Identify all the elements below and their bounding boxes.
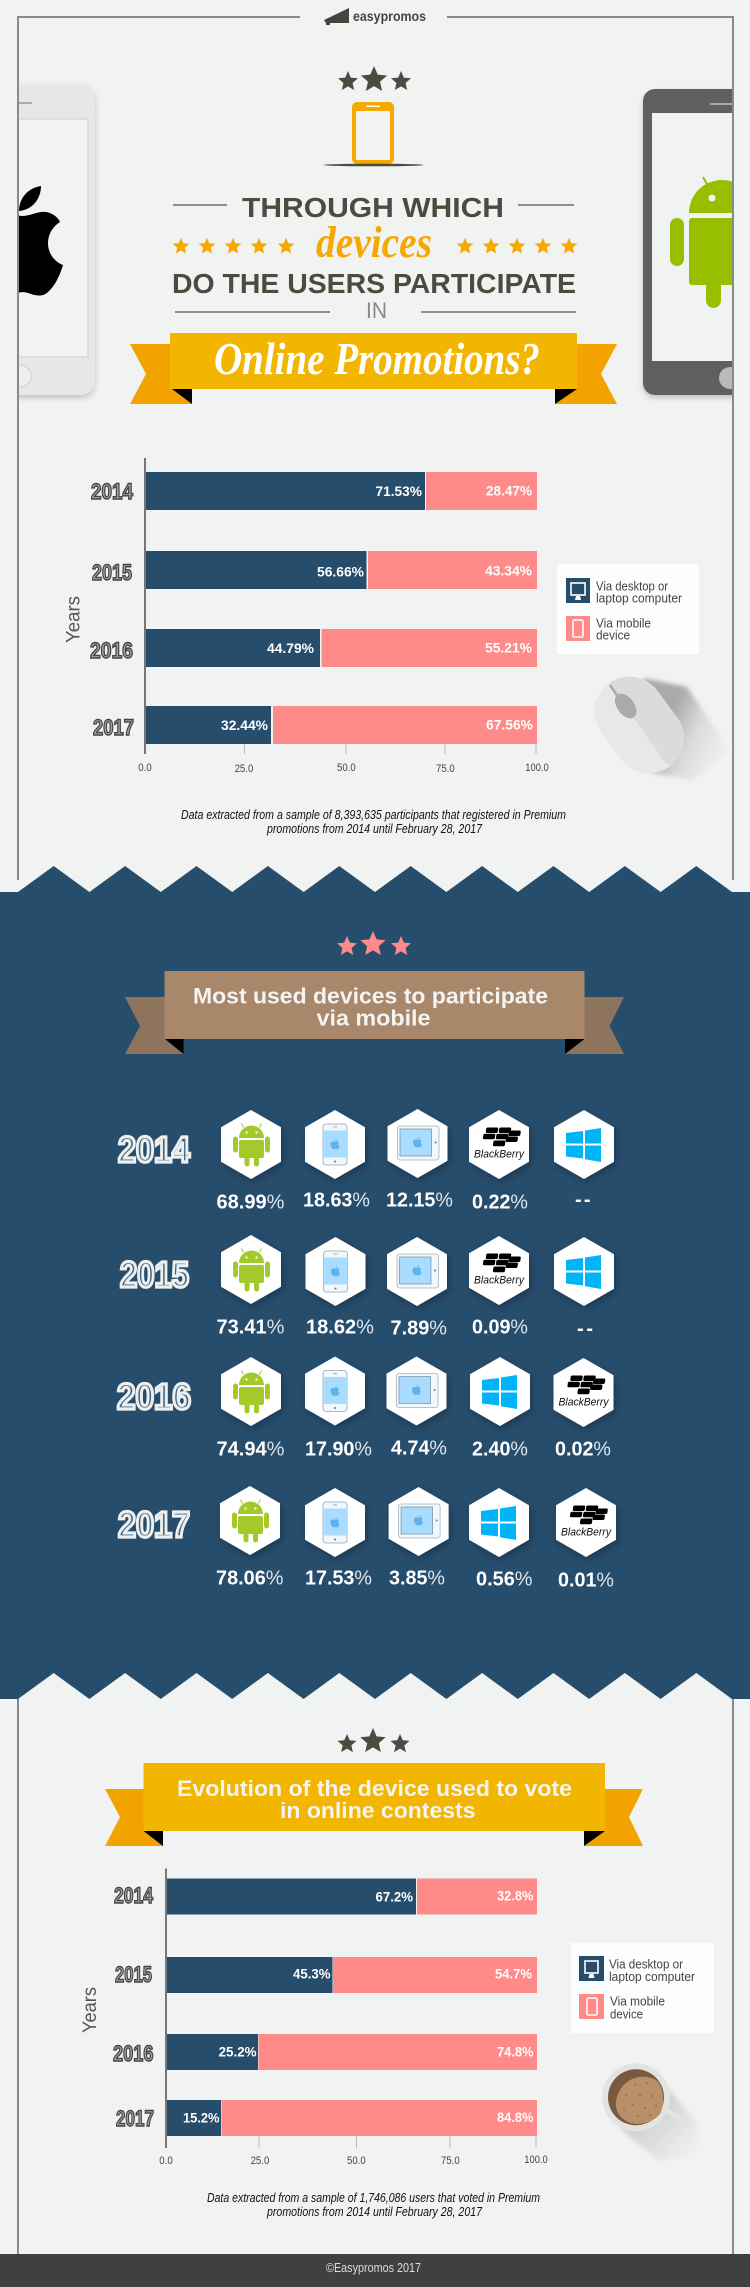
bar chart: participation by device 2014-2017: 2015 bbox=[92, 560, 132, 585]
bar chart: participation by device 2014-2017: 56.66% bbox=[317, 564, 365, 580]
axis label: Years: Years bbox=[64, 596, 84, 643]
legend: device colours: device bbox=[610, 2006, 643, 2022]
row: 2017: 3.85% bbox=[389, 1568, 445, 1590]
row: 2017 bbox=[118, 1486, 616, 1592]
bar chart: participation by device 2014-2017: 50.0 bbox=[337, 762, 356, 774]
bar chart: voting device 2014-2017: 2017 bbox=[116, 2106, 154, 2131]
row: 2017: 17.53% bbox=[305, 1568, 372, 1590]
bar chart: participation by device 2014-2017: 44.79% bbox=[267, 640, 315, 656]
bar chart: participation by device 2014-2017: 0.0 bbox=[138, 762, 152, 774]
bar chart: voting device 2014-2017: 15.2% bbox=[183, 2110, 220, 2126]
row: 2016: 74.94% bbox=[216, 1438, 285, 1460]
row: 2017: 78.06% bbox=[216, 1568, 284, 1590]
caption: second chart bbox=[207, 2190, 540, 2219]
panel: most used devices via mobile bbox=[0, 866, 750, 1699]
row of stars left of devices bbox=[173, 238, 294, 254]
row of stars right of devices bbox=[457, 238, 577, 254]
illustration: white iPhone with apple logo bbox=[19, 84, 98, 400]
bar chart: voting device 2014-2017: 75.0 bbox=[441, 2155, 460, 2167]
legend: device colours: laptop computer bbox=[609, 1969, 696, 1984]
row: 2017: 0.01% bbox=[558, 1570, 614, 1592]
row: 2015: 73.41% bbox=[216, 1316, 285, 1338]
legend: device colours: Via mobile bbox=[610, 1994, 665, 2008]
title: THROUGH WHICH bbox=[242, 192, 504, 223]
row: 2015: BlackBerry bbox=[474, 1274, 525, 1286]
bar chart: voting device 2014-2017: 54.7% bbox=[495, 1966, 533, 1982]
bar chart: participation by device 2014-2017: 43.34% bbox=[485, 562, 533, 578]
illustration: dark Android phone bbox=[640, 89, 732, 400]
bar chart: participation by device 2014-2017: 32.44% bbox=[221, 717, 269, 733]
legend: device colours: device bbox=[596, 628, 630, 642]
banner: Online Promotions? bbox=[130, 333, 617, 404]
legend: device colours bbox=[557, 564, 699, 654]
bar chart: voting device 2014-2017: 25.2% bbox=[219, 2044, 257, 2060]
illustration: coffee cup bbox=[602, 2063, 697, 2160]
legend: device colours: laptop computer bbox=[596, 590, 683, 606]
bar chart: participation by device 2014-2017: 2016 bbox=[90, 638, 133, 663]
row: 2015 bbox=[120, 1235, 614, 1340]
banner: evolution of the device: in online contests bbox=[280, 1798, 476, 1823]
bar chart: voting device 2014-2017: 2015 bbox=[115, 1962, 152, 1987]
banner: evolution of the device bbox=[105, 1763, 643, 1846]
bar chart: voting device 2014-2017: 67.2% bbox=[376, 1888, 414, 1904]
caption: second chart: Data extracted from a sample of 1,746,086 users that voted in Premium bbox=[207, 2190, 540, 2205]
bar chart: voting device 2014-2017: 74.8% bbox=[497, 2044, 534, 2060]
legend: device colours: Via mobile bbox=[596, 616, 651, 630]
banner: Online Promotions?: Online Promotions? bbox=[214, 333, 540, 384]
legend: device colours bbox=[571, 1943, 714, 2033]
banner: most used devices: via mobile bbox=[316, 1006, 430, 1030]
bar chart: voting device 2014-2017: 32.8% bbox=[497, 1888, 534, 1904]
row: 2014: 2014 bbox=[118, 1129, 190, 1170]
bar chart: participation by device 2014-2017: 55.21% bbox=[485, 640, 533, 656]
row: 2016: 4.74% bbox=[391, 1438, 447, 1460]
icon: orange phone bbox=[324, 103, 424, 166]
row: 2016 bbox=[117, 1356, 614, 1460]
row: 2015: 0.09% bbox=[472, 1316, 528, 1338]
banner: most used devices bbox=[125, 971, 624, 1054]
row: 2014: 18.63% bbox=[303, 1190, 370, 1212]
bar chart: participation by device 2014-2017: 2014 bbox=[91, 479, 134, 504]
bar chart: participation by device 2014-2017: 25.0 bbox=[235, 763, 253, 775]
bar chart: voting device 2014-2017: 84.8% bbox=[497, 2109, 534, 2125]
bar chart: participation by device 2014-2017: 67.56% bbox=[486, 716, 534, 732]
icon: three stars bbox=[338, 66, 411, 91]
bar chart: participation by device 2014-2017: 100.0 bbox=[525, 762, 549, 774]
caption: first chart: Data extracted from a sample of 8,393,635 participants that registered in Premium bbox=[181, 807, 566, 822]
legend: device colours: Via desktop or bbox=[596, 578, 669, 594]
caption: second chart: promotions from 2014 until February 28, 2017 bbox=[266, 2204, 483, 2219]
bar chart: participation by device 2014-2017: 71.53% bbox=[376, 483, 423, 499]
banner: evolution of the device: Evolution of the device used to vote bbox=[177, 1776, 572, 1801]
icon: pink stars bbox=[337, 931, 411, 955]
axis label: Years: Years bbox=[80, 1987, 101, 2033]
row: 2015: 2015 bbox=[120, 1254, 189, 1295]
title: devices bbox=[316, 218, 432, 267]
logo: easypromos: easypromos bbox=[353, 8, 426, 24]
row: 2016: 2016 bbox=[117, 1376, 191, 1417]
footer: ©Easypromos 2017 bbox=[326, 2261, 421, 2275]
title: DO THE USERS PARTICIPATE bbox=[172, 268, 576, 299]
row: 2017: 0.56% bbox=[476, 1568, 533, 1590]
caption: first chart: promotions from 2014 until February 28, 2017 bbox=[266, 821, 483, 836]
row: 2015: -- bbox=[577, 1318, 593, 1340]
row: 2016: 2.40% bbox=[472, 1438, 528, 1460]
bar chart: voting device 2014-2017: 45.3% bbox=[293, 1966, 331, 1982]
row: 2014: 0.22% bbox=[472, 1192, 528, 1214]
row: 2014: 68.99% bbox=[216, 1192, 285, 1214]
banner: most used devices: Most used devices to participate bbox=[193, 984, 548, 1008]
row: 2015: 7.89% bbox=[390, 1318, 447, 1340]
illustration: computer mouse bbox=[594, 676, 720, 779]
bar chart: participation by device 2014-2017 bbox=[90, 458, 549, 775]
row: 2014: BlackBerry bbox=[474, 1148, 525, 1160]
bar chart: voting device 2014-2017: 100.0 bbox=[524, 2154, 548, 2166]
row: 2017: 2017 bbox=[118, 1504, 190, 1545]
bar chart: voting device 2014-2017: 25.0 bbox=[251, 2155, 269, 2167]
row: 2016: BlackBerry bbox=[558, 1396, 610, 1408]
logo: easypromos bbox=[324, 8, 426, 25]
row: 2017: BlackBerry bbox=[561, 1526, 612, 1538]
bar chart: voting device 2014-2017: 0.0 bbox=[159, 2155, 173, 2167]
bar chart: participation by device 2014-2017: 2017 bbox=[93, 715, 134, 740]
title: IN bbox=[366, 298, 387, 323]
row: 2014: 12.15% bbox=[386, 1190, 453, 1212]
caption: first chart bbox=[181, 807, 566, 836]
row: 2016: 0.02% bbox=[555, 1438, 611, 1460]
bar chart: voting device 2014-2017 bbox=[113, 1868, 548, 2167]
bar chart: voting device 2014-2017: 2016 bbox=[113, 2041, 154, 2066]
bar chart: voting device 2014-2017: 50.0 bbox=[347, 2155, 366, 2167]
bar chart: participation by device 2014-2017: 75.0 bbox=[436, 763, 455, 775]
bar chart: voting device 2014-2017: 2014 bbox=[114, 1883, 154, 1908]
title bbox=[172, 192, 576, 323]
row: 2014: -- bbox=[575, 1189, 590, 1211]
footer bbox=[0, 2254, 750, 2287]
row: 2014 bbox=[118, 1109, 614, 1214]
row: 2015: 18.62% bbox=[306, 1316, 374, 1338]
row: 2016: 17.90% bbox=[305, 1438, 372, 1460]
bar chart: participation by device 2014-2017: 28.47% bbox=[486, 482, 533, 498]
legend: device colours: Via desktop or bbox=[609, 1956, 684, 1972]
icon: dark stars bbox=[337, 1728, 410, 1752]
